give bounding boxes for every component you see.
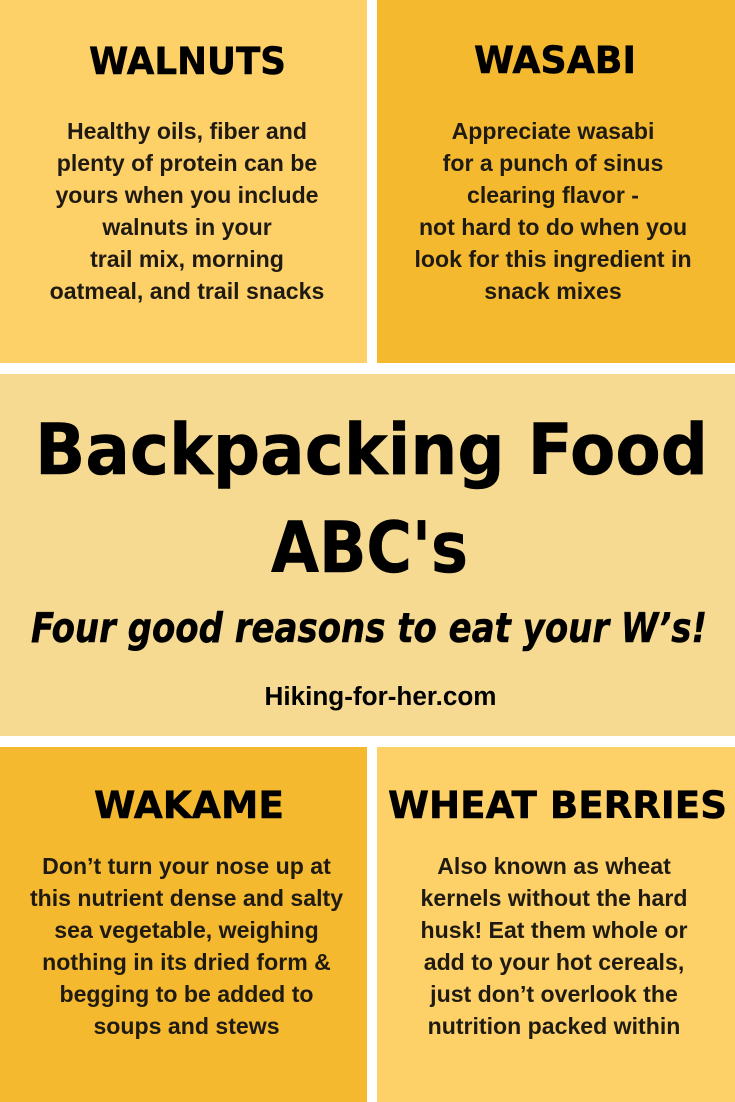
text block: wakame: Don’t turn your nose up at (42, 853, 331, 879)
text block: wakame: this nutrient dense and salty (30, 885, 343, 911)
text block: wakame: sea vegetable, weighing (54, 917, 319, 943)
text block: walnuts: trail mix, morning (90, 246, 284, 272)
text block: wasabi: not hard to do when you (419, 214, 687, 240)
text block: wasabi: clearing flavor - (467, 182, 639, 208)
title: Backpacking Food (35, 409, 708, 491)
panel: wakame (0, 747, 367, 1102)
text block: wakame (30, 853, 343, 1039)
panel: title banner (0, 374, 735, 736)
website: Hiking-for-her.com (265, 681, 496, 711)
heading: walnuts: WALNUTS (89, 40, 286, 83)
heading: wasabi: WASABI (474, 39, 636, 82)
text block: walnuts: oatmeal, and trail snacks (50, 278, 324, 304)
text block: wheat berries: nutrition packed within (428, 1013, 680, 1039)
heading: wheat berries: WHEAT BERRIES (388, 784, 727, 827)
title (35, 409, 708, 589)
text block: wheat berries (421, 853, 688, 1039)
title: ABC's (271, 507, 468, 589)
text block: walnuts: Healthy oils, fiber and (67, 118, 307, 144)
text block: wheat berries: just don’t overlook the (430, 981, 678, 1007)
text block: wasabi: Appreciate wasabi (452, 118, 654, 144)
text block: wheat berries: kernels without the hard (421, 885, 687, 911)
text block: wakame: nothing in its dried form & (42, 949, 331, 975)
text block: wasabi (414, 118, 692, 304)
text block: wasabi: for a punch of sinus (443, 150, 663, 176)
text block: wakame: begging to be added to (59, 981, 314, 1007)
heading: wakame: WAKAME (94, 784, 284, 827)
text block: wheat berries: Also known as wheat (437, 853, 671, 879)
text block: wakame: soups and stews (93, 1013, 280, 1039)
panel: wheat berries (377, 747, 735, 1102)
text block: walnuts: yours when you include (55, 182, 319, 208)
text block: walnuts: walnuts in your (102, 214, 272, 240)
text block: wheat berries: husk! Eat them whole or (421, 917, 687, 943)
panel: wasabi (377, 0, 735, 363)
text block: wasabi: snack mixes (484, 278, 622, 304)
text block: wasabi: look for this ingredient in (414, 246, 692, 272)
panel: walnuts (0, 0, 367, 363)
text block: walnuts (50, 118, 324, 304)
text block: walnuts: plenty of protein can be (57, 150, 317, 176)
text block: wheat berries: add to your hot cereals, (424, 949, 684, 975)
